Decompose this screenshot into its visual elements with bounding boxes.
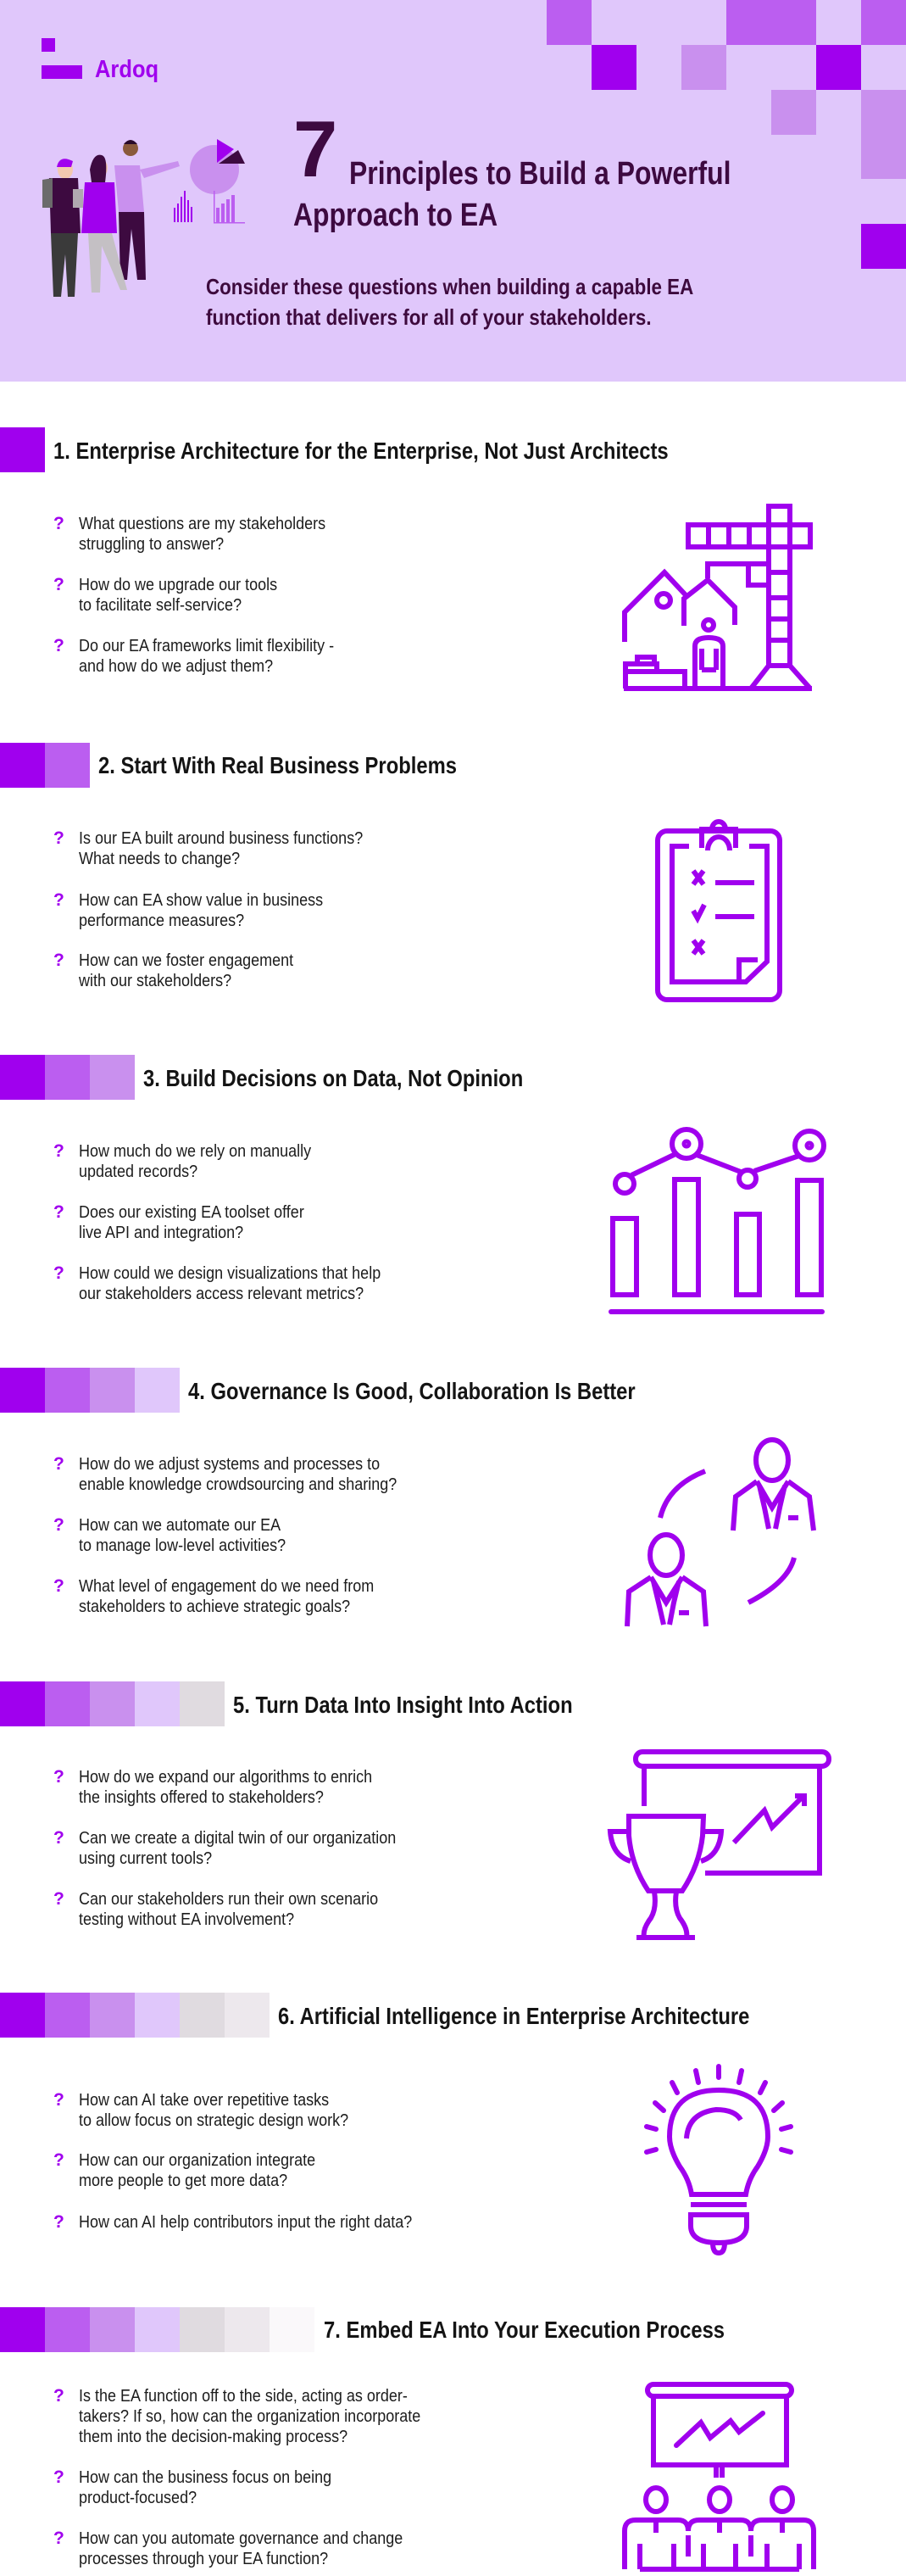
section 3 questions: ? — [53, 1263, 64, 1283]
section 7 questions: ? — [53, 2467, 64, 2487]
subtitle: Consider these questions when building a capable EA — [206, 274, 693, 299]
section 4 heading: 4. Governance Is Good, Collaboration Is Better — [188, 1378, 636, 1404]
section 1 heading: 1. Enterprise Architecture for the Enterprise, Not Just Architects — [53, 438, 669, 464]
section 4 questions: How do we adjust systems and processes to — [79, 1455, 380, 1474]
section 3 questions: our stakeholders access relevant metrics? — [79, 1285, 364, 1303]
section 1 questions: to facilitate self-service? — [79, 596, 242, 615]
section 5 questions: Can we create a digital twin of our organization — [79, 1829, 396, 1848]
person 2 — [92, 159, 108, 177]
section 4 color blocks — [0, 1368, 180, 1413]
section 2 heading: 2. Start With Real Business Problems — [98, 752, 457, 778]
section 7 heading: 7. Embed EA Into Your Execution Process — [324, 2317, 725, 2343]
section 7 questions: them into the decision-making process? — [79, 2428, 347, 2446]
section 6 questions: How can AI take over repetitive tasks — [79, 2091, 329, 2110]
section 7 questions: ? — [53, 2529, 64, 2548]
header panel — [0, 0, 906, 382]
section 2 questions: How can we foster engagement — [79, 951, 293, 970]
section 6 heading: 6. Artificial Intelligence in Enterprise Architecture — [278, 2003, 749, 2029]
section 2 — [0, 743, 457, 990]
section 2 questions: Is our EA built around business functions? — [79, 829, 363, 848]
section 7 questions — [53, 2386, 420, 2568]
section 7 questions: Is the EA function off to the side, acting as order- — [79, 2387, 408, 2406]
person 3 — [123, 141, 138, 156]
section 3 heading: 3. Build Decisions on Data, Not Opinion — [143, 1065, 523, 1091]
section 4 questions: ? — [53, 1515, 64, 1535]
section 5 questions — [53, 1767, 396, 1929]
section 6 questions: ? — [53, 2150, 64, 2170]
section 1 questions: ? — [53, 575, 64, 594]
section 1 questions: Do our EA frameworks limit flexibility - — [79, 637, 334, 655]
section 3 — [0, 1055, 523, 1303]
section 3 questions: live API and integration? — [79, 1224, 243, 1242]
section 6 questions: ? — [53, 2090, 64, 2110]
section 1 questions — [53, 514, 334, 676]
subtitle — [206, 274, 693, 330]
logo — [42, 38, 158, 83]
section 3 questions — [53, 1141, 381, 1303]
section 2 questions: How can EA show value in business — [79, 891, 323, 910]
section 5 — [0, 1681, 573, 1929]
illustration: people with charts — [42, 139, 245, 297]
section 4 questions: ? — [53, 1454, 64, 1474]
section 3 questions: Does our existing EA toolset offer — [79, 1203, 304, 1222]
section 6 questions: How can our organization integrate — [79, 2151, 315, 2170]
section 5 color blocks — [0, 1681, 225, 1726]
section 2 questions: ? — [53, 951, 64, 970]
section 1 questions: ? — [53, 514, 64, 533]
logo: Ardoq — [95, 56, 158, 83]
section 5 questions: the insights offered to stakeholders? — [79, 1788, 324, 1807]
section 4 questions: ? — [53, 1576, 64, 1596]
section 6 questions: more people to get more data? — [79, 2172, 287, 2190]
section 7 questions: product-focused? — [79, 2489, 197, 2507]
section 5 questions: using current tools? — [79, 1849, 212, 1868]
section 4 questions: enable knowledge crowdsourcing and sharing? — [79, 1475, 397, 1494]
section 3 questions: How could we design visualizations that help — [79, 1264, 381, 1283]
section 2 color blocks — [0, 743, 90, 788]
section 4 questions — [53, 1454, 397, 1616]
section 7 questions: ? — [53, 2386, 64, 2406]
section 6 questions: to allow focus on strategic design work? — [79, 2111, 348, 2130]
section 7 questions: takers? If so, how can the organization incorporate — [79, 2407, 420, 2426]
section 1 questions: ? — [53, 636, 64, 655]
subtitle: function that delivers for all of your stakeholders. — [206, 304, 652, 330]
section 2 questions: What needs to change? — [79, 850, 240, 868]
title — [293, 104, 731, 233]
title: Approach to EA — [293, 198, 497, 233]
section 6 color blocks — [0, 1993, 270, 2038]
section 2 questions — [53, 828, 363, 990]
section 7 questions: How can you automate governance and change — [79, 2529, 403, 2548]
section 5 questions: Can our stakeholders run their own scenario — [79, 1890, 378, 1909]
section 4 — [0, 1368, 636, 1616]
section 4 questions: stakeholders to achieve strategic goals? — [79, 1597, 350, 1616]
section 3 questions: ? — [53, 1141, 64, 1161]
section 1 questions: struggling to answer? — [79, 535, 224, 554]
section 5 questions: ? — [53, 1828, 64, 1848]
section 2 questions: ? — [53, 890, 64, 910]
section 4 questions: What level of engagement do we need from — [79, 1577, 374, 1596]
section 5 questions: How do we expand our algorithms to enrich — [79, 1768, 372, 1787]
section 6 — [0, 1993, 749, 2232]
section 1 questions: What questions are my stakeholders — [79, 515, 325, 533]
section 1 questions: and how do we adjust them? — [79, 657, 273, 676]
section 5 heading: 5. Turn Data Into Insight Into Action — [233, 1692, 573, 1718]
section 7 questions: How can the business focus on being — [79, 2468, 331, 2487]
section 3 questions: How much do we rely on manually — [79, 1142, 311, 1161]
section 4 questions: How can we automate our EA — [79, 1516, 281, 1535]
section 1 color blocks — [0, 427, 45, 472]
section 1 — [0, 427, 669, 676]
section 6 questions — [53, 2090, 412, 2232]
section 2 questions: ? — [53, 828, 64, 848]
section 7 — [0, 2307, 725, 2568]
section 2 questions: performance measures? — [79, 912, 244, 930]
section 2 questions: with our stakeholders? — [79, 972, 231, 990]
section 3 questions: ? — [53, 1202, 64, 1222]
section 3 color blocks — [0, 1055, 135, 1100]
section 6 questions: ? — [53, 2212, 64, 2232]
section 5 questions: testing without EA involvement? — [79, 1910, 294, 1929]
title: Principles to Build a Powerful — [349, 156, 731, 192]
section 5 questions: ? — [53, 1767, 64, 1787]
decorative squares — [547, 0, 906, 269]
section 3 questions: updated records? — [79, 1163, 197, 1181]
section 5 questions: ? — [53, 1889, 64, 1909]
section 1 questions: How do we upgrade our tools — [79, 576, 277, 594]
section 6 questions: How can AI help contributors input the right data? — [79, 2213, 412, 2232]
title: 7 — [293, 104, 337, 193]
section 7 color blocks — [0, 2307, 270, 2352]
section 7 questions: processes through your EA function? — [79, 2550, 328, 2568]
person 1 — [58, 160, 73, 179]
section 4 questions: to manage low-level activities? — [79, 1536, 286, 1555]
